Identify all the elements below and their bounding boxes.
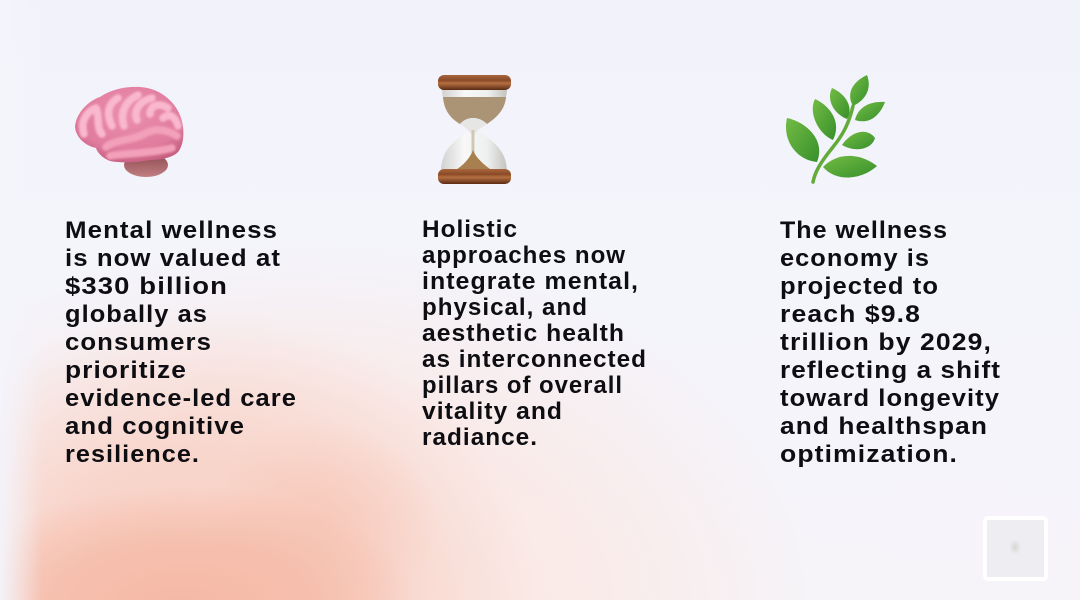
- text block: wellness economy: trillion by 2029,: [780, 329, 992, 356]
- text block: holistic approaches: pillars of overall: [422, 372, 623, 399]
- text block: mental wellness: prioritize: [65, 357, 187, 384]
- text block: mental wellness: resilience.: [65, 441, 200, 468]
- text block: holistic approaches: integrate mental,: [422, 268, 639, 295]
- icon: green sprig: [786, 75, 885, 182]
- text block: mental wellness: evidence-led care: [65, 385, 297, 412]
- text block: mental wellness: [65, 217, 297, 468]
- text block: wellness economy: optimization.: [780, 441, 958, 468]
- text block: wellness economy: [780, 217, 1001, 468]
- text block: wellness economy: reflecting a shift: [780, 357, 1001, 384]
- icon: hourglass: [438, 75, 511, 184]
- text block: holistic approaches: Holistic: [422, 216, 518, 243]
- text block: holistic approaches: vitality and: [422, 398, 563, 425]
- text block: holistic approaches: [422, 216, 647, 451]
- text block: mental wellness: Mental wellness: [65, 217, 278, 244]
- text block: mental wellness: $330 billion: [65, 273, 228, 300]
- text block: wellness economy: toward longevity: [780, 385, 1000, 412]
- text block: mental wellness: is now valued at: [65, 245, 281, 272]
- text block: wellness economy: projected to: [780, 273, 939, 300]
- icon: brain: [75, 87, 183, 177]
- text block: mental wellness: consumers: [65, 329, 212, 356]
- text block: wellness economy: The wellness: [780, 217, 948, 244]
- text block: mental wellness: and cognitive: [65, 413, 245, 440]
- text block: wellness economy: economy is: [780, 245, 930, 272]
- text block: holistic approaches: aesthetic health: [422, 320, 625, 347]
- text block: mental wellness: globally as: [65, 301, 208, 328]
- text block: holistic approaches: radiance.: [422, 424, 538, 451]
- text block: holistic approaches: physical, and: [422, 294, 588, 321]
- watermark badge: [985, 518, 1046, 579]
- text block: wellness economy: and healthspan: [780, 413, 988, 440]
- text block: holistic approaches: approaches now: [422, 242, 626, 269]
- text block: wellness economy: reach $9.8: [780, 301, 921, 328]
- text block: holistic approaches: as interconnected: [422, 346, 647, 373]
